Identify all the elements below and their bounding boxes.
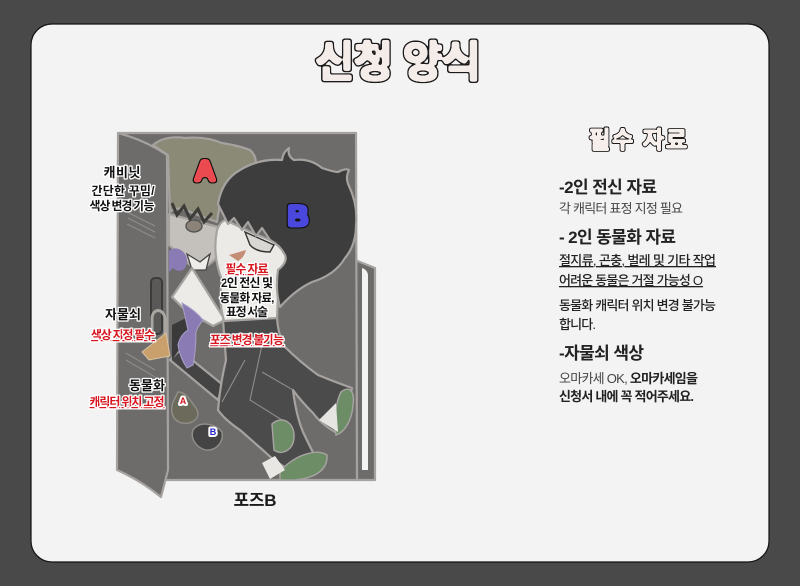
character B mouth <box>229 250 246 261</box>
cabinet description <box>90 183 155 213</box>
section: padlock colour: 신청서 내에 꼭 적어주세요. <box>559 389 694 404</box>
character A dark arm and leg <box>170 350 223 400</box>
character A face <box>169 214 222 270</box>
dark striped collar <box>172 316 190 360</box>
cabinet right side panel <box>355 260 375 480</box>
door vents <box>126 212 155 377</box>
required materials description: 표정 서술 <box>226 305 268 319</box>
section: padlock colour: -자물쇠 색상 <box>559 344 644 363</box>
shoe middle <box>272 420 294 452</box>
section: full body: 각 캐릭터 표정 지정 필요 <box>559 201 683 216</box>
section: animal materials: 동물화 캐릭터 위치 변경 불가능 <box>559 298 716 313</box>
purple tie <box>178 303 203 368</box>
character A shirt <box>172 268 225 326</box>
character B body and legs <box>218 317 352 470</box>
section: full body <box>559 178 683 216</box>
section: animal materials: 합니다. <box>559 317 596 332</box>
padlock heading: 자물쇠 <box>105 307 141 322</box>
lock body <box>142 333 170 360</box>
label: padlock note <box>91 307 155 342</box>
animal heading: 동물화 <box>129 378 165 393</box>
section: full body: -2인 전신 자료 <box>559 178 657 197</box>
character A hair <box>153 137 256 222</box>
door handle <box>151 278 162 334</box>
label: cabinet note <box>90 165 155 213</box>
caption: pose B: 포즈B <box>234 491 276 510</box>
character B leg folds <box>222 345 293 425</box>
label: small A: A <box>180 396 187 406</box>
label: animal note <box>90 378 165 409</box>
cabinet right white strip <box>362 268 368 470</box>
section: padlock colour <box>559 344 698 404</box>
character A eye <box>186 220 202 232</box>
sock right <box>319 403 338 432</box>
cabinet description: 간단한 꾸밈/ <box>92 183 155 198</box>
cabinet heading: 캐비닛 <box>104 165 141 180</box>
cabinet back panel <box>119 133 357 480</box>
shoe bottom <box>280 452 327 480</box>
label: big B marker: B <box>287 200 309 233</box>
character A fringe lines <box>172 203 212 222</box>
shoe sole <box>262 456 285 479</box>
label: pose change not allowed: 포즈 변경 불가능 <box>210 332 284 347</box>
character B eye <box>245 232 274 252</box>
character A mouth <box>187 254 210 270</box>
cabinet door <box>117 133 168 497</box>
heading: required materials: 필수 자료 <box>588 127 688 154</box>
section: animal materials <box>559 228 716 332</box>
required materials description: 동물화 자료, <box>220 290 274 305</box>
character B shirt and face <box>215 220 287 321</box>
section: animal materials: 어려운 동물은 거절 가능성 O <box>559 273 703 288</box>
animal A <box>172 392 198 423</box>
label: small B: B <box>210 427 217 437</box>
title: 신청 양식 <box>315 39 481 87</box>
label: required materials note <box>220 262 274 319</box>
required materials description <box>220 276 274 319</box>
required materials description: 2인 전신 및 <box>221 276 273 290</box>
character B hair <box>218 148 356 307</box>
panel: cabinet pose illustration <box>117 133 375 497</box>
lock shackle <box>152 310 165 335</box>
purple animal on shoulder <box>169 248 187 272</box>
cabinet description: 색상 변경 가능 <box>90 198 154 213</box>
section: animal materials: - 2인 동물화 자료 <box>559 228 676 247</box>
animal position fixed: 캐릭터 위치 고정 <box>90 395 164 409</box>
label: big A marker: A <box>194 155 216 188</box>
section: animal materials: 절지류, 곤충, 벌레 및 기타 작업 <box>559 253 716 268</box>
shoe right <box>335 389 353 435</box>
padlock colour required: 색상 지정 필수 <box>91 328 155 342</box>
animal B <box>192 424 222 450</box>
section: padlock colour: 오마카세 OK, 오마카세임을 <box>559 371 698 386</box>
required materials heading: 필수 자료 <box>226 262 268 276</box>
panel: required materials list <box>559 127 716 404</box>
